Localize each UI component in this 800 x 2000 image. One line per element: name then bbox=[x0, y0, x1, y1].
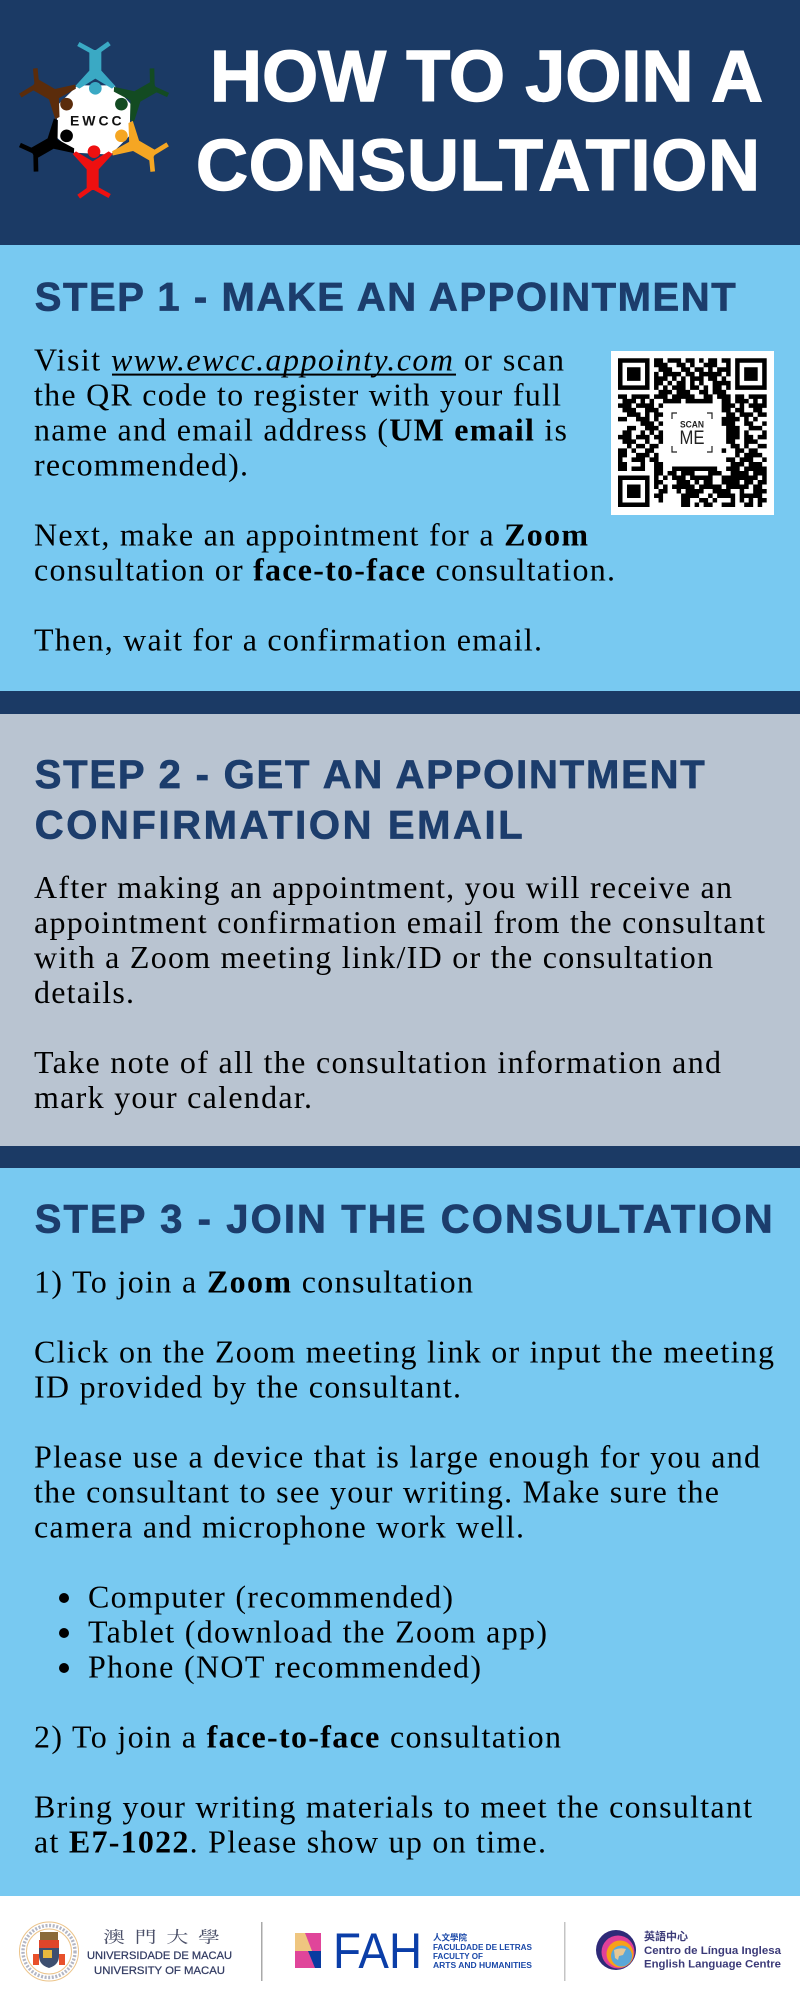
icon: university seal bbox=[20, 1922, 78, 1981]
text block: bring materials bbox=[34, 1789, 752, 1860]
logo: English Language Centre: Centro de Língua Inglesa bbox=[644, 1945, 782, 1957]
panel: step 2 bbox=[0, 714, 800, 1146]
text block: confirmation email: appointment confirmation email from the consultant bbox=[34, 904, 765, 940]
text block: zoom link bbox=[34, 1334, 774, 1405]
text block: device advice bbox=[34, 1439, 760, 1545]
text block: device advice: camera and microphone work well. bbox=[34, 1509, 524, 1545]
text block: make an appointment: consultation or face-to-face consultation. bbox=[34, 552, 615, 588]
panel: footer logos bbox=[0, 1896, 800, 2000]
text block: join face-to-face: 2) To join a face-to-face consultation bbox=[34, 1719, 561, 1755]
logo: English Language Centre: English Language Centre bbox=[644, 1958, 781, 1970]
icon: EWCC logo: EWCC bbox=[70, 113, 122, 129]
bullet list: devices: Computer (recommended) bbox=[88, 1579, 453, 1615]
divider band bbox=[0, 691, 800, 714]
text block: take note: mark your calendar. bbox=[34, 1079, 312, 1115]
text block: register instructions: name and email address (UM email is bbox=[34, 412, 567, 448]
text block: wait for email: Then, wait for a confirmation email. bbox=[34, 622, 542, 658]
text block: register instructions bbox=[34, 342, 567, 483]
heading: step 1: STEP 1 - MAKE AN APPOINTMENT bbox=[35, 276, 736, 320]
logo: University of Macau bbox=[20, 1922, 232, 1981]
icon: QR code bbox=[611, 351, 774, 515]
text block: join a zoom consultation: 1) To join a Zoom consultation bbox=[34, 1264, 473, 1300]
text block: take note: Take note of all the consultation information and bbox=[34, 1044, 721, 1080]
logo: Faculty of Arts and Humanities: FACULTY OF bbox=[433, 1952, 483, 1961]
icon: FAH square bbox=[295, 1933, 321, 1968]
bullet list: devices: Phone (NOT recommended) bbox=[88, 1649, 481, 1685]
text block: zoom link: ID provided by the consultant. bbox=[34, 1369, 461, 1405]
icon: QR code: ME bbox=[680, 428, 704, 449]
logo: Faculty of Arts and Humanities: FAH bbox=[333, 1923, 422, 1979]
text block: register instructions: the QR code to register with your full bbox=[34, 377, 561, 413]
text block: confirmation email bbox=[34, 869, 765, 1010]
title: CONSULTATION bbox=[196, 126, 760, 206]
text block: make an appointment: Next, make an appointment for a Zoom bbox=[34, 517, 588, 553]
heading: step 2: CONFIRMATION EMAIL bbox=[35, 804, 523, 848]
panel: step 3 bbox=[0, 1168, 800, 1896]
text block: confirmation email: with a Zoom meeting link/ID or the consultation bbox=[34, 939, 713, 975]
text block: bring materials: Bring your writing materials to meet the consultant bbox=[34, 1789, 752, 1825]
text block: make an appointment bbox=[34, 517, 615, 588]
logo: Faculty of Arts and Humanities: 人文學院 bbox=[433, 1932, 467, 1942]
text block: register instructions: Visit www.ewcc.appointy.com or scan bbox=[34, 342, 564, 378]
panel: header bbox=[0, 0, 800, 245]
heading: step 3: STEP 3 - JOIN THE CONSULTATION bbox=[35, 1198, 773, 1242]
logo: English Language Centre bbox=[596, 1929, 782, 1970]
text block: take note bbox=[34, 1044, 721, 1115]
heading: step 2: STEP 2 - GET AN APPOINTMENT bbox=[35, 753, 705, 797]
text block: bring materials: at E7-1022. Please show up on time. bbox=[34, 1824, 546, 1860]
panel: step 1 bbox=[0, 245, 800, 691]
logo: University of Macau: UNIVERSITY OF MACAU bbox=[94, 1965, 225, 1977]
bullet list: devices: Tablet (download the Zoom app) bbox=[88, 1614, 547, 1650]
logo: Faculty of Arts and Humanities bbox=[295, 1923, 533, 1979]
logo: Faculty of Arts and Humanities: FACULDADE DE LETRAS bbox=[433, 1943, 533, 1952]
text block: confirmation email: details. bbox=[34, 974, 134, 1010]
title bbox=[196, 37, 763, 206]
heading: step 2 bbox=[35, 753, 705, 848]
logo: University of Macau: 澳門大學 bbox=[103, 1925, 220, 1947]
divider band bbox=[0, 1146, 800, 1168]
text block: zoom link: Click on the Zoom meeting link or input the meeting bbox=[34, 1334, 774, 1370]
text block: register instructions: recommended). bbox=[34, 447, 248, 483]
text block: device advice: Please use a device that is large enough for you and bbox=[34, 1439, 760, 1475]
icon: EWCC logo bbox=[17, 43, 171, 197]
title: HOW TO JOIN A bbox=[210, 37, 763, 117]
icon: QR code: SCAN bbox=[680, 420, 704, 430]
text block: confirmation email: After making an appointment, you will receive an bbox=[34, 869, 732, 905]
logo: Faculty of Arts and Humanities: ARTS AND HUMANITIES bbox=[433, 1961, 533, 1970]
logo: University of Macau: UNIVERSIDADE DE MACAU bbox=[87, 1950, 232, 1962]
icon: globe rings bbox=[596, 1930, 636, 1970]
logo: English Language Centre: 英語中心 bbox=[644, 1929, 688, 1943]
bullet list: devices bbox=[59, 1579, 547, 1685]
text block: device advice: the consultant to see your writing. Make sure the bbox=[34, 1474, 719, 1510]
